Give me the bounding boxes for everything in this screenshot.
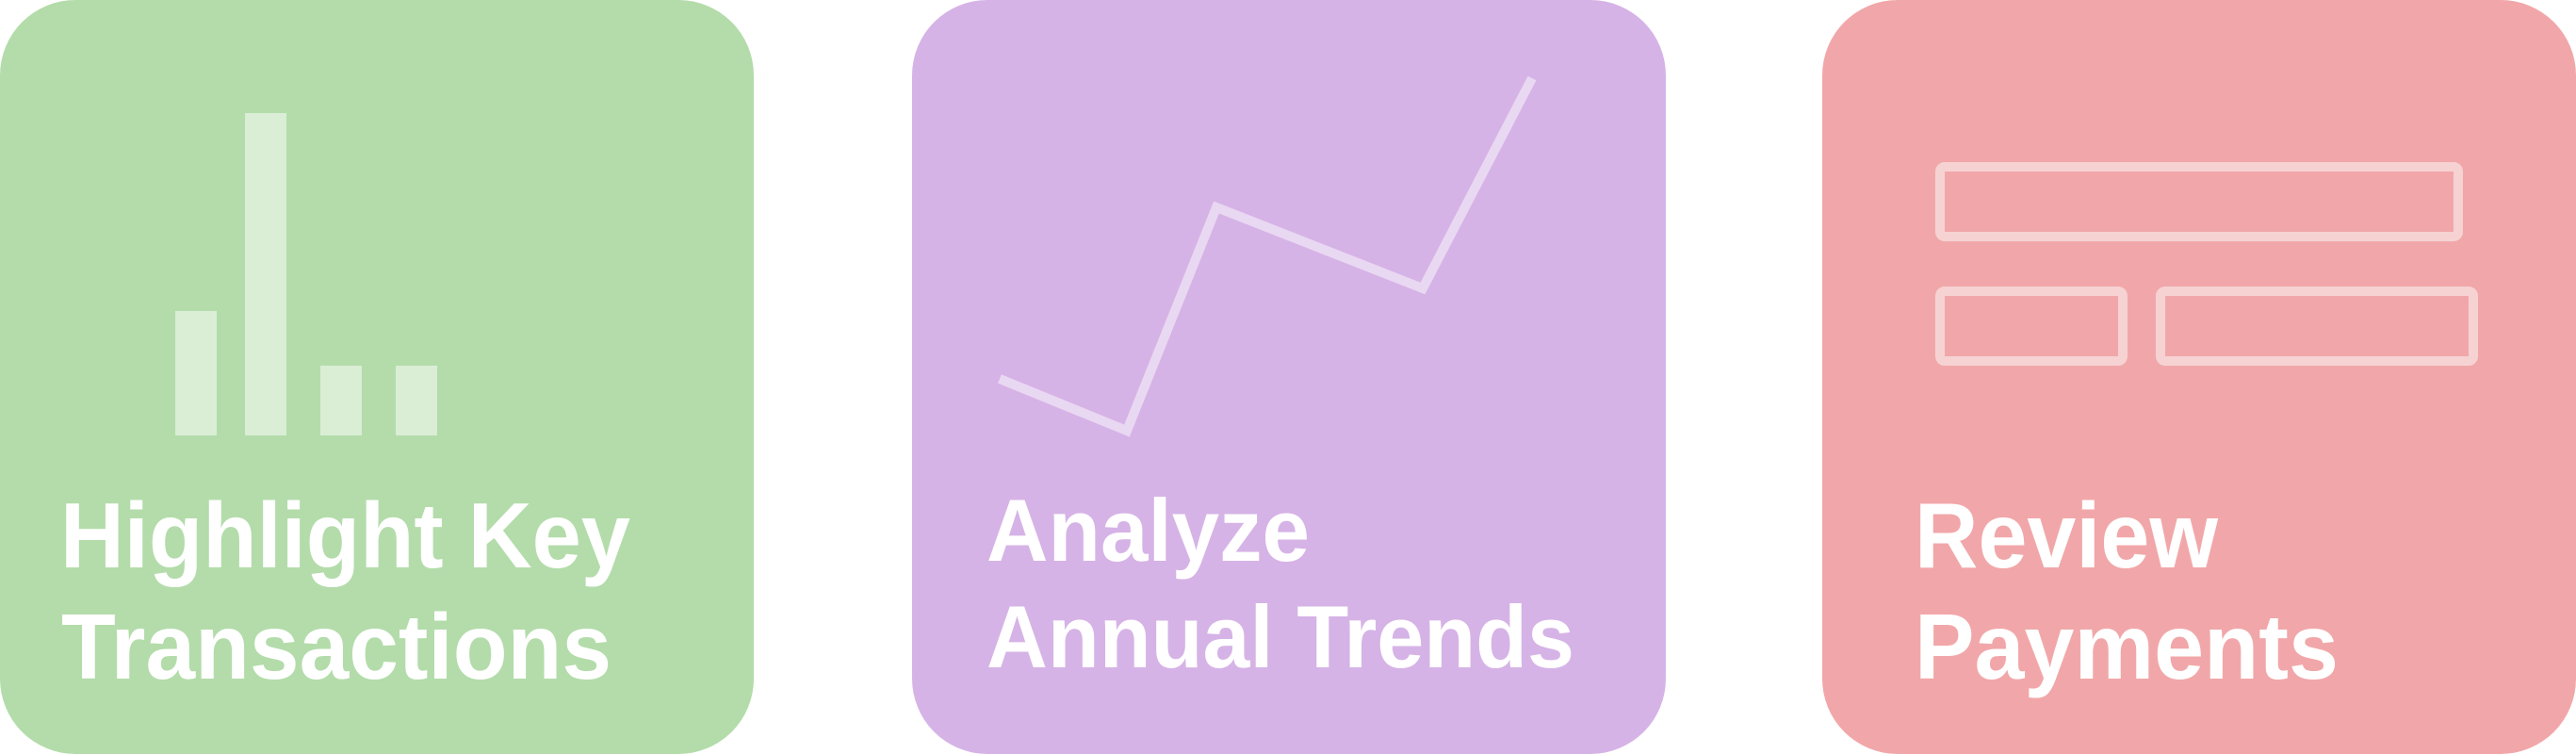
panel: highlight key transactions	[0, 0, 754, 754]
line chart icon	[1000, 78, 1532, 431]
panel background: green	[0, 0, 754, 754]
bar chart icon	[175, 113, 437, 435]
heading: highlight key transactions	[60, 484, 630, 698]
heading: highlight key transactions: Transactions	[61, 595, 611, 698]
panel: analyze annual trends	[912, 0, 1666, 754]
heading: review payments: Review	[1915, 484, 2219, 587]
heading: analyze annual trends: Analyze	[986, 481, 1310, 580]
panel background: purple	[912, 0, 1666, 754]
heading: analyze annual trends	[986, 481, 1574, 686]
heading: analyze annual trends: Annual Trends	[986, 587, 1574, 686]
heading: review payments	[1915, 484, 2339, 698]
heading: review payments: Payments	[1915, 595, 2339, 698]
heading: highlight key transactions: Highlight Key	[60, 484, 630, 587]
panel background: pink	[1822, 0, 2576, 754]
form fields icon	[1940, 167, 2473, 361]
panel: review payments	[1822, 0, 2576, 754]
